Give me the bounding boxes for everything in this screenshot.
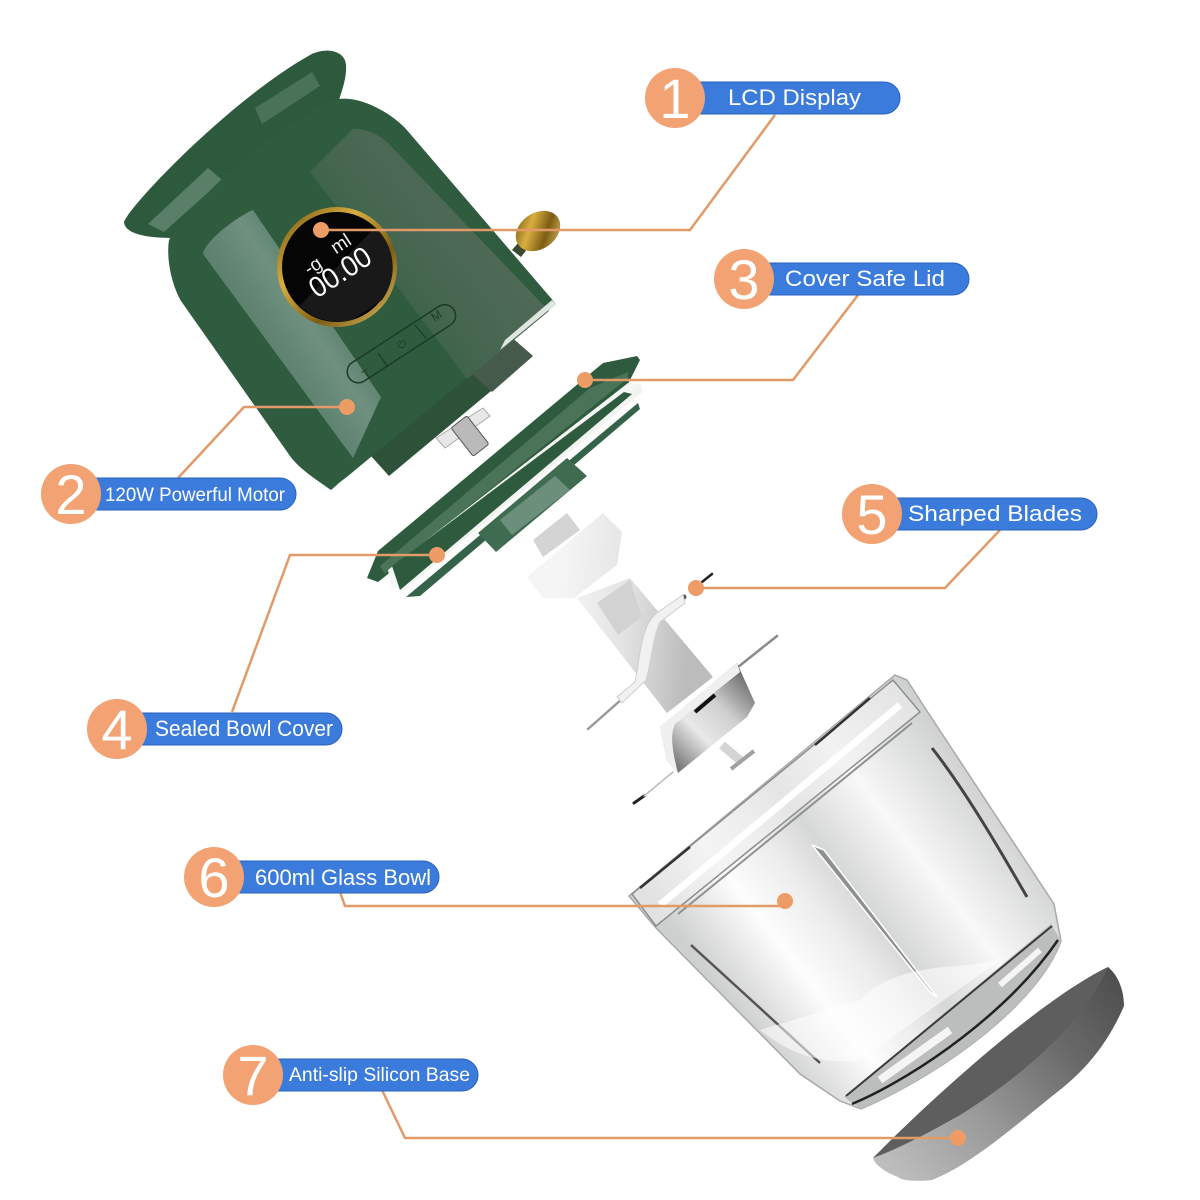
label 3: Cover Safe Lid [714, 248, 969, 311]
label 5: Sharped Blades: 5 [856, 483, 888, 546]
button strip: M [429, 307, 445, 324]
label 4: Sealed Bowl Cover: 4 [101, 698, 133, 761]
LCD screen: -g [300, 253, 326, 280]
button strip: ⏻ [395, 336, 409, 352]
silicone base [873, 967, 1124, 1181]
label 6: 600ml Glass Bowl: 600ml Glass Bowl [255, 865, 431, 890]
label 5: Sharped Blades: Sharped Blades [908, 501, 1082, 526]
drive shaft [436, 408, 490, 456]
label 2: 120W Powerful Motor [41, 463, 296, 526]
button strip: T [360, 366, 374, 382]
label 1: LCD Display: LCD Display [728, 85, 861, 110]
shaft [577, 578, 713, 713]
lower cup [660, 663, 755, 773]
rim [632, 680, 920, 926]
blades [588, 574, 777, 803]
motor unit [124, 51, 568, 490]
pin [722, 745, 754, 769]
button strip [343, 300, 460, 387]
LCD screen: 00.00 [303, 241, 378, 305]
blade arm [617, 595, 685, 703]
knob [508, 202, 568, 260]
safety lid and bowl cover [367, 356, 643, 597]
label 5: Sharped Blades [842, 483, 1097, 546]
inner white area [760, 960, 1000, 1061]
motor body [168, 99, 556, 490]
LCD screen: ml [327, 230, 355, 259]
label 4: Sealed Bowl Cover [87, 698, 342, 761]
bottom ring [844, 924, 1061, 1109]
flange [527, 513, 622, 598]
glass bowl [629, 675, 1061, 1109]
side slits [932, 748, 1027, 897]
label 3: Cover Safe Lid: 3 [728, 248, 760, 311]
blade assembly [527, 513, 777, 803]
top nub [533, 513, 580, 557]
collar [371, 336, 533, 476]
label 4: Sealed Bowl Cover: Sealed Bowl Cover [155, 716, 333, 741]
label 2: 120W Powerful Motor: 120W Powerful Motor [105, 485, 286, 506]
label 2: 120W Powerful Motor: 2 [55, 463, 87, 526]
top disc [124, 51, 346, 238]
label 6: 600ml Glass Bowl: 6 [198, 846, 230, 909]
label 6: 600ml Glass Bowl [184, 846, 439, 909]
label 7: Anti-slip Silicon Base [223, 1044, 478, 1107]
rib [812, 845, 937, 997]
leader lines [178, 115, 1000, 1146]
label 1: LCD Display [645, 67, 900, 130]
label 7: Anti-slip Silicon Base: Anti-slip Silicon Base [289, 1065, 470, 1086]
label 1: LCD Display: 1 [659, 67, 691, 130]
label 7: Anti-slip Silicon Base: 7 [237, 1044, 269, 1107]
label 3: Cover Safe Lid: Cover Safe Lid [785, 266, 945, 291]
LCD screen [277, 207, 397, 327]
